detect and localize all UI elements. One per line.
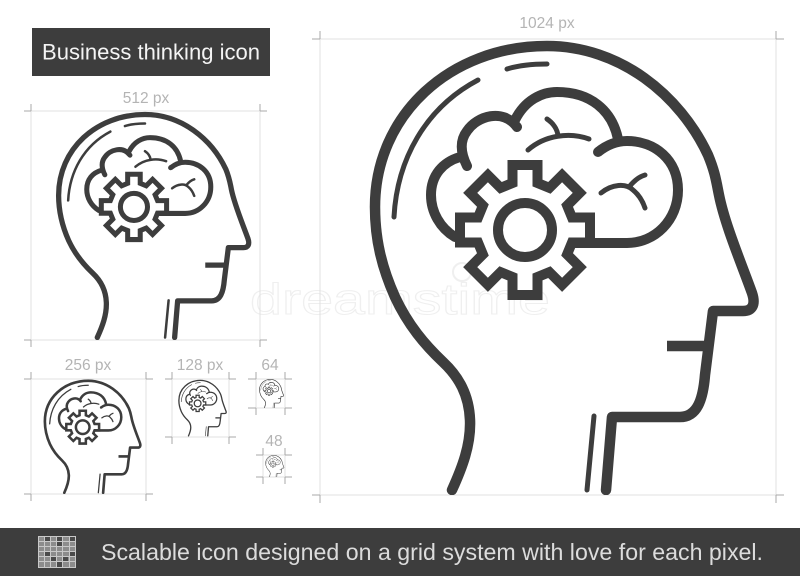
title banner: Business thinking icon	[42, 40, 260, 64]
size label: 128 px: 128 px	[177, 357, 224, 374]
size label: 64: 64	[261, 357, 279, 374]
icon: head with brain and gear, 256 px	[45, 381, 140, 493]
icon: pixel grid	[38, 536, 76, 568]
watermark	[250, 263, 550, 324]
icon: head with brain and gear, 64 px	[259, 379, 284, 408]
size label: 1024 px: 1024 px	[519, 15, 575, 32]
size label: 48: 48	[265, 433, 283, 450]
size label: 512 px: 512 px	[123, 90, 170, 107]
title banner	[32, 28, 270, 76]
footer tagline: Scalable icon designed on a grid system with love for each pixel.	[101, 539, 763, 565]
frame: 64 px	[248, 372, 292, 415]
footer bar	[0, 528, 800, 576]
icon: head with brain and gear, 128 px	[179, 380, 226, 436]
frame: 256 px	[24, 372, 153, 501]
icon: head with brain and gear, 512 px	[59, 115, 249, 337]
size label: 256 px: 256 px	[65, 357, 112, 374]
frame: 128 px	[165, 372, 236, 444]
frame: 512 px	[24, 104, 267, 347]
icon: head with brain and gear, 48 px	[266, 455, 284, 477]
frame: 1024 px	[312, 31, 784, 503]
icon: head with brain and gear, 1024 px	[375, 46, 754, 490]
frame: 48 px	[256, 448, 292, 484]
watermark: dreamstime	[250, 275, 550, 324]
